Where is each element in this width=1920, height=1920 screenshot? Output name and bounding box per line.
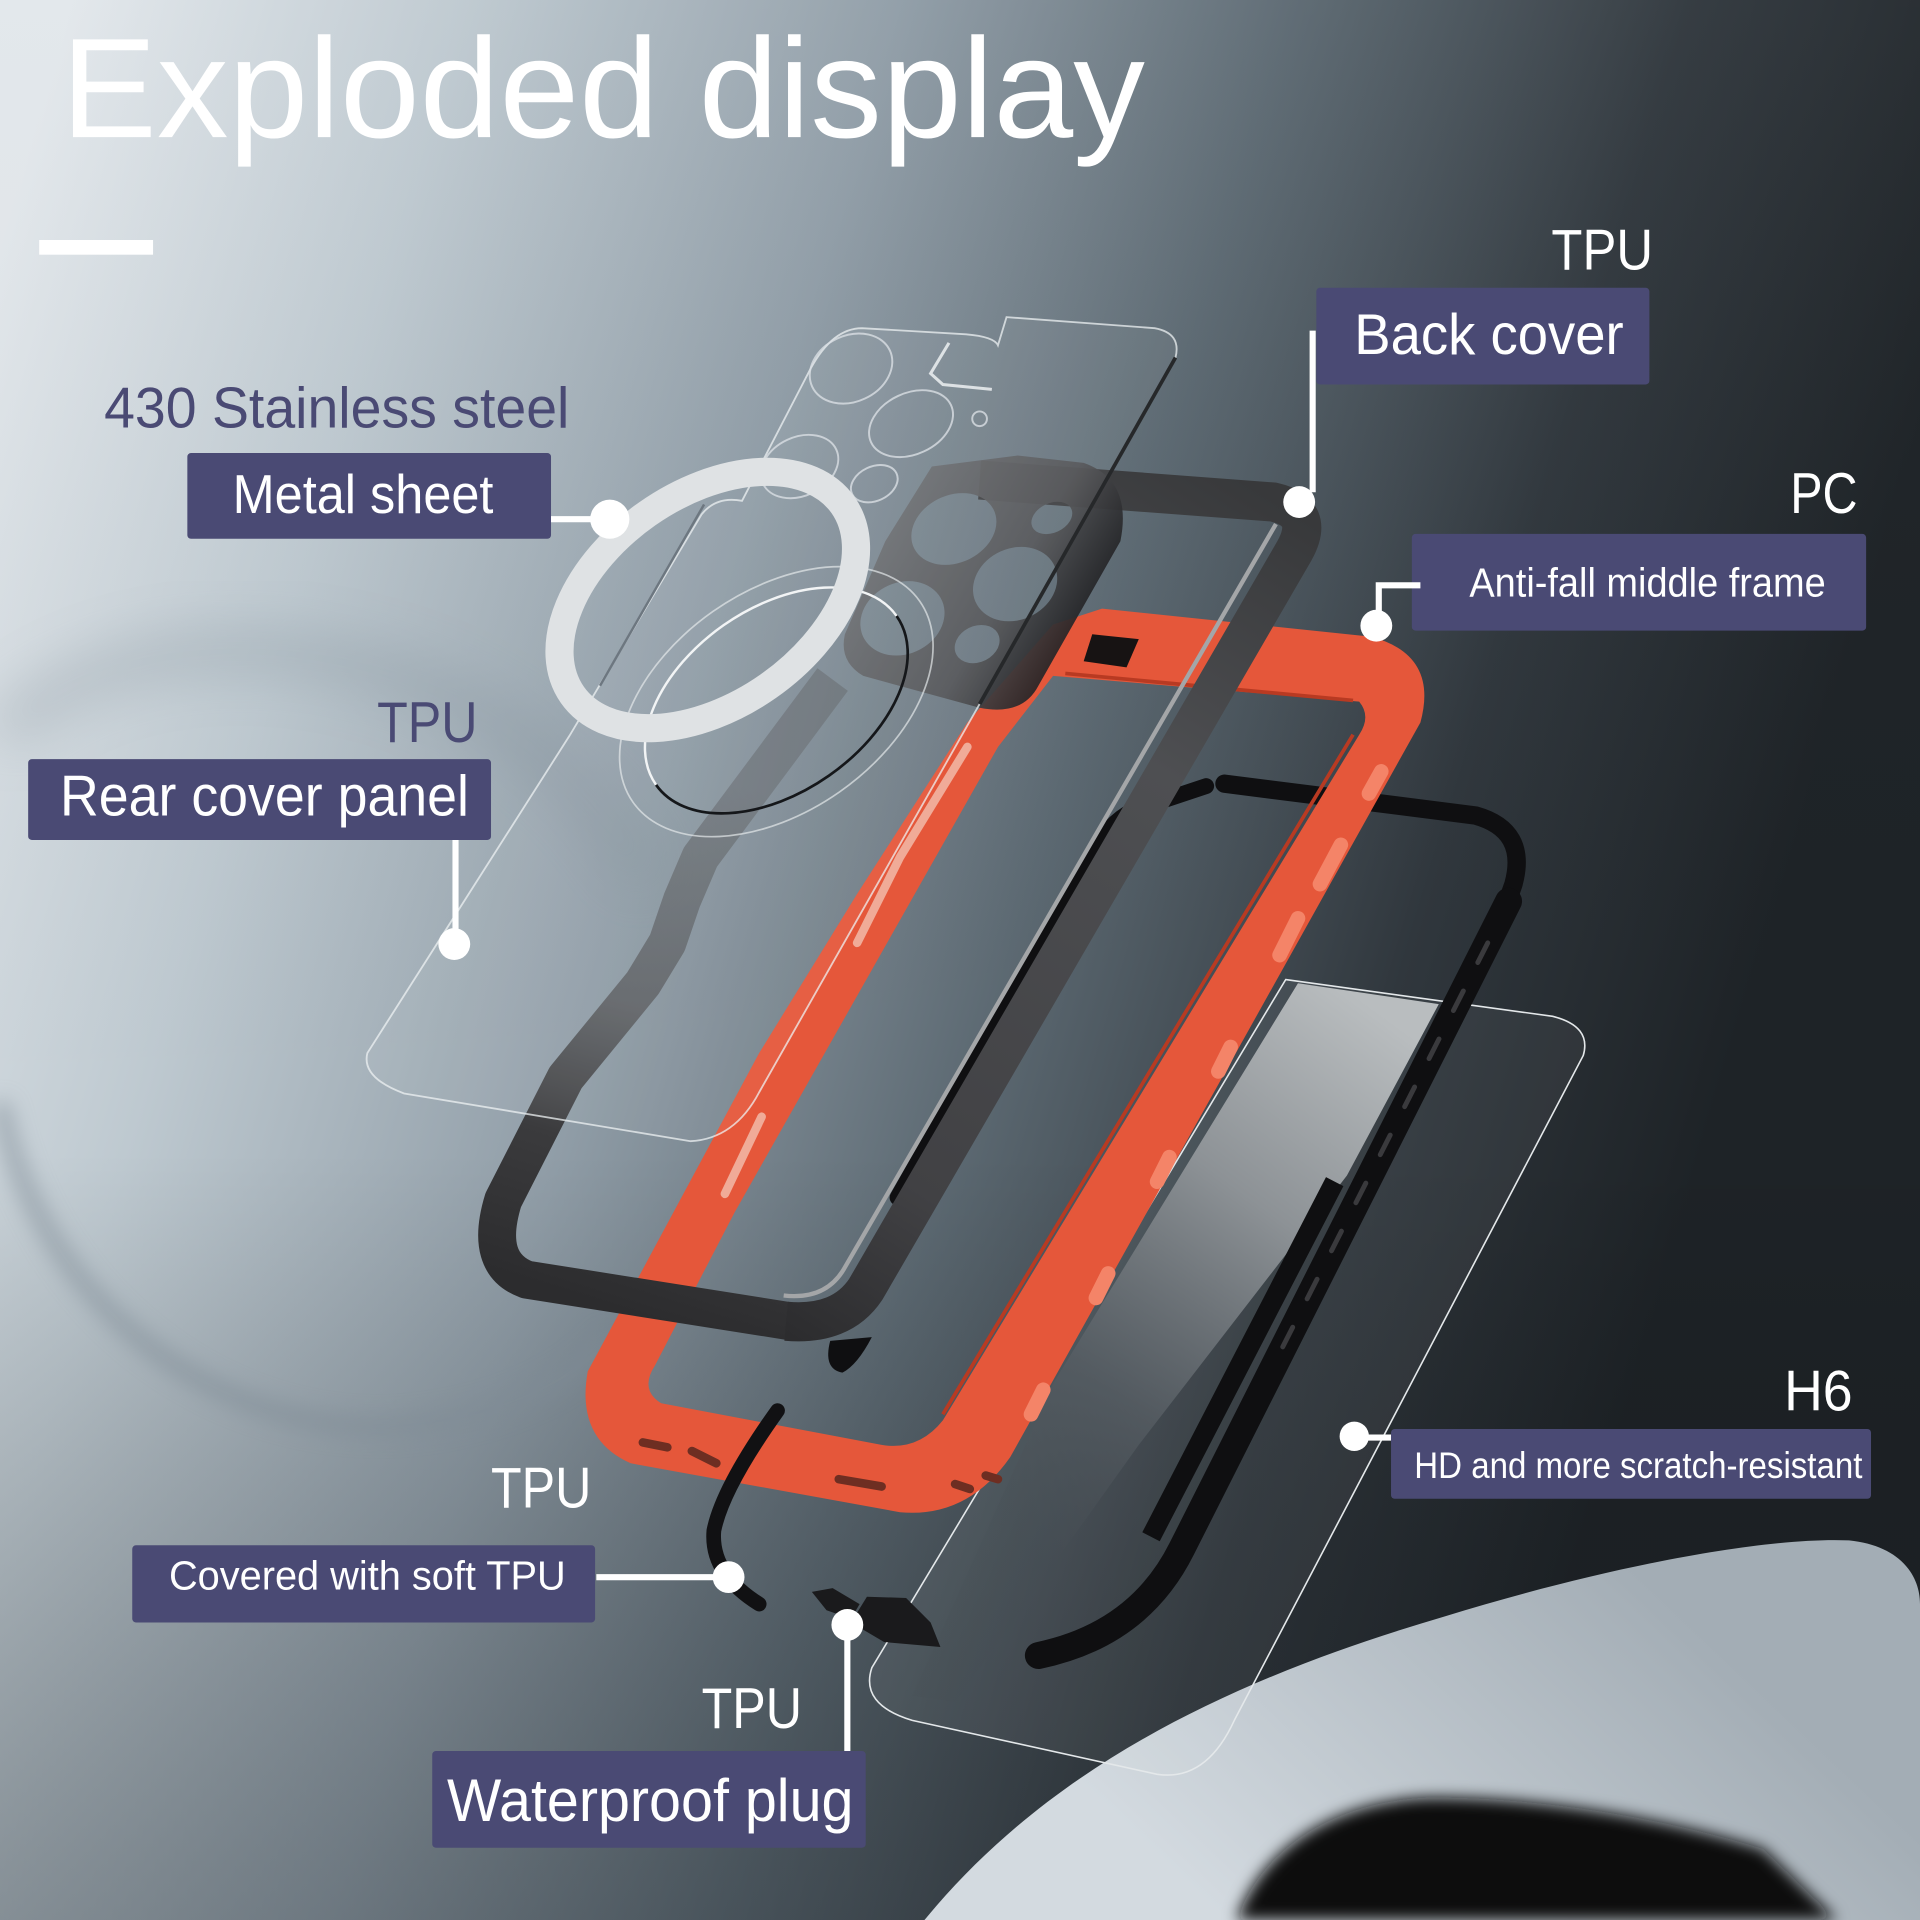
dark back cover frame (497, 480, 1302, 1373)
callout: rear cover panel: TPU (377, 691, 478, 755)
clear rear cover panel (367, 317, 1177, 1141)
callout: middle frame (1360, 462, 1866, 642)
callout: rear cover panel: Rear cover panel (60, 765, 469, 829)
callout: metal sheet: Metal sheet (233, 463, 493, 525)
callout: metal sheet (104, 376, 629, 539)
callout: back cover: TPU (1551, 218, 1653, 282)
panel camera circles (751, 320, 992, 510)
dish dark shadow (1237, 1798, 1837, 1920)
glass highlight (912, 983, 1439, 1702)
waterproof plug (812, 1588, 940, 1647)
panel inner left ridge (600, 504, 704, 686)
title: Exploded display (61, 9, 1145, 168)
callout: back cover (1283, 218, 1653, 518)
frame bumps (1031, 771, 1381, 1414)
callout: waterproof plug: TPU (702, 1677, 802, 1741)
callout: waterproof plug: Waterproof plug (447, 1767, 853, 1834)
background dish (924, 1540, 1920, 1920)
frame left side slots (725, 747, 967, 1194)
clip under frame (828, 1337, 872, 1373)
white metal ring (512, 419, 904, 781)
frame top black clip (1084, 634, 1139, 667)
callout: metal sheet: 430 Stainless steel (104, 376, 569, 440)
callout: soft TPU: Covered with soft TPU (169, 1552, 566, 1598)
callout: glass: HD and more scratch-resistant (1414, 1445, 1862, 1486)
camera plate (844, 456, 1123, 710)
red middle frame (586, 609, 1424, 1513)
magnetic ring outlines (570, 511, 983, 892)
screen protector glass (870, 980, 1585, 1775)
panel dark right edge (980, 358, 1176, 704)
black side frame piece (898, 784, 1517, 1656)
callout: middle frame: PC (1790, 462, 1858, 526)
callout: waterproof plug (432, 1609, 866, 1848)
callout: back cover: Back cover (1354, 303, 1624, 367)
callout: soft TPU: TPU (491, 1456, 591, 1520)
title rule (39, 240, 153, 255)
callout: rear cover panel (28, 691, 491, 960)
lower left black seal piece (714, 1411, 778, 1604)
decorative soft circle (0, 651, 649, 1427)
callout: glass: H6 (1784, 1360, 1853, 1424)
callout: soft TPU (132, 1456, 744, 1622)
callout: glass (1340, 1360, 1871, 1499)
frame bottom ports (643, 1442, 998, 1489)
callout: middle frame: Anti-fall middle frame (1469, 559, 1826, 605)
